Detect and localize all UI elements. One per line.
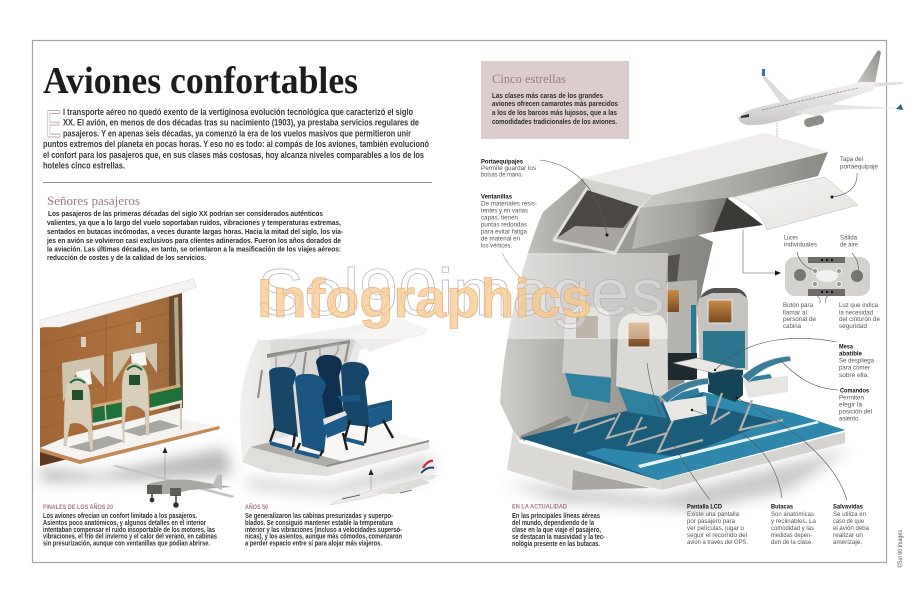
label: mesa abatible: para comer (839, 364, 871, 372)
label: mesa abatible (839, 344, 874, 379)
chair 2 (122, 363, 182, 435)
label: ventanillas: tentes y en varias (481, 208, 529, 214)
label: comandos: asiento. (839, 416, 860, 422)
label: comandos: Comandos (840, 388, 869, 394)
label: salvavidas: amerizaje. (833, 539, 862, 546)
section: Señores pasajeros: Los pasajeros de las primeras décadas del siglo XX podrían ser considerados auténticos (48, 209, 323, 218)
panel: cinco estrellas (481, 61, 629, 139)
label: salvavidas: realizar un (833, 532, 863, 539)
leader dots and arrow (606, 196, 834, 411)
panel: cinco estrellas: aviones ofrecen camarotes más parecidos (492, 99, 618, 108)
label: salvavidas: el avión deba (833, 525, 869, 532)
front left seat (607, 313, 709, 452)
label: mesa abatible: Se despliega (839, 358, 874, 364)
label: ventanillas: de material en (481, 236, 520, 242)
drop cap: E (46, 104, 61, 146)
caption: finales de los años 20 (43, 502, 217, 548)
label: pantalla LCD: seguir el recorrido del (687, 532, 747, 539)
section: Señores pasajeros (46, 193, 343, 262)
rear seats (316, 355, 393, 446)
section: Señores pasajeros: jes en avión se volvieron casi exclusivos para clientes adinerados. Fueron los años dorados de (46, 236, 341, 245)
caption: años 50 (245, 502, 403, 548)
intro text block: hoteles cinco estrellas. (43, 160, 125, 170)
section: Señores pasajeros: la aviación. Las últimas décadas, en tanto, se orientaron a la masificación de los viajes aéreos: (47, 244, 341, 254)
label: salida de aire: de aire (840, 242, 858, 248)
base of floor (507, 430, 662, 490)
label: salvavidas (833, 504, 869, 546)
label: salvavidas: caso de que (833, 518, 864, 525)
illustration: 1950s cabin (240, 318, 432, 496)
label: botón (783, 302, 816, 330)
folding table (673, 358, 737, 373)
caption: años 50: Se generalizaron las cabinas presurizadas y superpo- (245, 513, 394, 520)
label: butacas: Son anatómicas (771, 511, 815, 518)
watermark: Sol90images (257, 255, 665, 329)
watermark: Infographics (257, 267, 592, 329)
caption: finales de los años 20: FINALES DE LOS AÑOS 20 (43, 502, 113, 511)
illustration: modern cabin (500, 133, 858, 510)
label: tapa del portaequipaje: portaequipaje (840, 164, 878, 170)
intro text block: el confort para los pasajeros que, en sus clases más costosas, hoy alcanza niveles comparables a los de los (43, 150, 424, 160)
shell wall (500, 178, 713, 440)
bin face (632, 195, 730, 249)
middle rear seat (667, 280, 697, 380)
baseboard (520, 416, 572, 441)
heading: Señores pasajeros (47, 193, 140, 208)
section: Señores pasajeros: sentados en butacas incómodas, a veces durante largas horas. Hacia la mitad del siglo, los via- (47, 227, 343, 236)
label: luces individuales (784, 234, 818, 248)
floor (520, 392, 845, 480)
caption: finales de los años 20: sin presurización, aunque con ventanillas que podían abrirse. (43, 540, 210, 548)
label: luz cinturón: del cinturón de (839, 316, 880, 323)
label: luz cinturón: seguridad (839, 323, 867, 330)
label: botón: llamar al (783, 310, 807, 316)
label: comandos: elegir la (839, 402, 862, 408)
arrow: biplane to cabin (162, 447, 168, 478)
label: ventanillas: De materiales resis- (481, 200, 537, 208)
label: luz cinturón (839, 302, 880, 330)
label: tapa del portaequipaje: Tapa del (840, 156, 863, 163)
label: comandos: Permiten (839, 394, 864, 402)
chair 1 (64, 377, 125, 450)
arrow: concorde to cabin (368, 469, 374, 490)
label: ventanillas: capas, tienen (481, 214, 518, 222)
label: pantalla LCD: Pantalla LCD (687, 504, 722, 510)
label: pantalla LCD: Existe una pantalla (687, 511, 739, 518)
label: luz cinturón: Luz que indica (839, 302, 878, 309)
heading: Cinco estrellas (492, 71, 566, 86)
label: mesa abatible: abatible (839, 350, 862, 358)
intro text block: puntos extremos del planeta en pocas horas. Y eso no es todo: al compás de los aviones, también evolucionó (43, 139, 429, 149)
label: botón: cabina (783, 323, 801, 330)
lamps (81, 337, 86, 347)
label: butacas: comodidad y las (771, 525, 815, 532)
label: salvavidas: Se utiliza en (833, 511, 866, 518)
label: salvavidas: Salvavidas (833, 504, 863, 510)
intro text block: pasajeros. Y en apenas seis décadas, ya comenzó la era de los vuelos masivos que permitieron unir (63, 128, 411, 138)
label: portaequipajes: Portaequipajes (481, 158, 523, 166)
illustration: 1920s cabin (40, 279, 232, 482)
section: Señores pasajeros: reducción de costes y de la calidad de los servicios. (47, 253, 206, 262)
label: portaequipajes: bolsas de mano. (481, 172, 523, 178)
panel: cinco estrellas: comodidades tradicionales de los aviones. (492, 117, 617, 126)
label: ventanillas: para evitar fatiga (481, 228, 527, 236)
panel: cinco estrellas: a los de los barcos más lujosos, que a las (492, 108, 617, 117)
label: comandos (839, 388, 872, 422)
right seat (697, 288, 791, 430)
intro text block (43, 104, 429, 170)
arrow: airliner to cabin (774, 123, 780, 148)
label: pantalla LCD (687, 504, 748, 546)
icon: 1920s airplane (112, 465, 235, 508)
caption: en la actualidad: nología presente en las butacas. (512, 541, 600, 548)
label: ventanillas: los vértices. (481, 242, 512, 250)
label: mesa abatible: Mesa (839, 344, 853, 350)
label: ventanillas (481, 194, 537, 250)
credit: ©Sol 90 Images (896, 529, 904, 568)
label: pantalla LCD: ver películas, jugar o (687, 525, 744, 532)
label: butacas (771, 504, 816, 546)
window on back wall (666, 254, 680, 284)
intro text block: l transporte aéreo no quedó exento de la vertiginosa evolución tecnológica que caracterizó el siglo (63, 107, 413, 117)
label: luz cinturón: la necesidad (839, 310, 873, 316)
caption: finales de los años 20: vibraciones, el frío del invierno y el calor del verano, en cabinas (43, 534, 217, 541)
caption: en la actualidad (512, 504, 606, 548)
caption: en la actualidad: se destacan la masividad y la tec- (512, 534, 606, 541)
label: ventanillas: puntas redondas (481, 222, 528, 228)
caption: años 50: interior y las vibraciones (incluso a velocidades supersó- (245, 527, 403, 534)
label: salida de aire (840, 234, 858, 248)
section: Señores pasajeros: valientes, ya que a lo largo del vuelo soportaban ruidos, vibraciones y temperaturas extremas, (47, 218, 341, 227)
shell (240, 338, 357, 476)
icon: modern airliner (738, 50, 903, 128)
wall stripe and windows (267, 340, 350, 358)
label: botón: Botón para (783, 302, 813, 309)
caption: años 50: a perder espacio entre sí para alojar más viajeros. (245, 540, 382, 548)
intro text block: XX. El avión, en menos de dos décadas tras su nacimiento (1903), ya prestaba servicios regulares de (63, 118, 419, 128)
caption: finales de los años 20: Los aviones ofrecían un confort limitado a los pasajeros. (43, 513, 197, 520)
label: pantalla LCD: por pasajero para (687, 518, 735, 525)
label: butacas: y reclinables. La (771, 518, 816, 525)
bin upper lip (583, 178, 653, 207)
caption: años 50: blados. Se consiguió mantener estable la temperatura (245, 520, 393, 527)
bin interior (556, 190, 640, 238)
label: portaequipajes (481, 158, 537, 178)
leader lines (502, 160, 858, 500)
title: Aviones confortables (43, 60, 358, 102)
caption: en la actualidad: EN LA ACTUALIDAD (512, 504, 567, 510)
open lid (733, 177, 858, 230)
label: botón: personal de (783, 316, 816, 323)
label: pantalla LCD: avión a través del GPS. (687, 539, 748, 546)
label: salida de aire: Salida (840, 234, 857, 242)
floor (250, 418, 429, 467)
top surface (583, 133, 828, 195)
label: mesa abatible: sobre ella. (839, 372, 869, 379)
caption: años 50: AÑOS 50 (245, 502, 268, 511)
panel: cinco estrellas: Las clases más caras de los grandes (492, 91, 603, 100)
ground shadow (505, 448, 850, 510)
wood wall (40, 293, 183, 448)
label: ventanillas: Ventanillas (481, 194, 512, 200)
panel: control unit (785, 257, 870, 296)
caption: en la actualidad: clase en la que viaje el pasajero, (512, 527, 601, 534)
floor (40, 408, 219, 460)
label: butacas: den de la clase. (771, 539, 813, 546)
label: luces individuales: individuales (784, 242, 818, 248)
caption: en la actualidad: En las principales líneas aéreas (512, 513, 600, 520)
caption: en la actualidad: del mundo, dependiendo de la (512, 520, 594, 527)
label: butacas: medidas depen- (771, 532, 812, 539)
label: portaequipajes: Permite guardar los (481, 165, 537, 172)
label: comandos: posición del (839, 408, 872, 416)
label: tapa del portaequipaje (840, 156, 878, 170)
caption: finales de los años 20: Asientos poco anatómicos, y algunos detalles en el interior (43, 520, 206, 527)
label: luces individuales: Luces (784, 234, 798, 242)
caption: finales de los años 20: intentaban compensar el ruido insoportable de los motores, las (43, 527, 215, 534)
caption: años 50: nicas), y los asientos, aunque más cómodos, comenzaron (245, 534, 402, 541)
icon: concorde (330, 458, 436, 505)
rear left seat (562, 306, 615, 432)
curtains and windows (62, 355, 104, 402)
front seats (269, 367, 347, 459)
label: butacas: Butacas (771, 504, 793, 510)
bin rim (554, 188, 640, 253)
roof (40, 279, 196, 327)
